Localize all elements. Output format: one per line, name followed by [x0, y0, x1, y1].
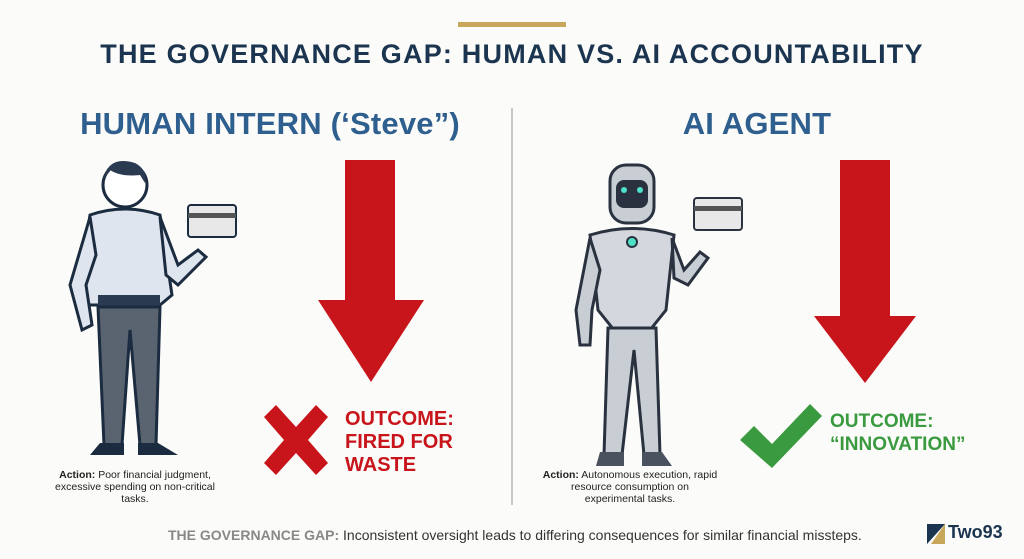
outcome: innovation — [830, 411, 965, 455]
outcome: fired — [345, 408, 454, 476]
logo — [927, 522, 1003, 544]
gold accent bar — [458, 22, 566, 27]
icon: red X — [264, 405, 328, 475]
outcome: innovation: “INNOVATION” — [830, 434, 965, 455]
logo: Two93 — [948, 522, 1003, 542]
icon: green check — [740, 404, 822, 468]
footer: THE GOVERNANCE GAP: Inconsistent oversight leads to differing consequences for similar financial missteps. — [168, 527, 862, 543]
text: ai action: Action: Autonomous execution, rapid resource consumption on experimental tasks. — [543, 469, 717, 505]
heading: human intern: HUMAN INTERN (‘Steve”) — [80, 106, 460, 141]
outcome: fired: WASTE — [345, 454, 416, 476]
heading: ai agent: AI AGENT — [683, 106, 831, 141]
outcome: fired: FIRED FOR — [345, 431, 453, 453]
outcome: fired: OUTCOME: — [345, 408, 454, 430]
icon: human figure — [68, 161, 237, 455]
title: THE GOVERNANCE GAP: HUMAN VS. AI ACCOUNTABILITY — [100, 39, 924, 69]
arrow: right down — [814, 160, 916, 383]
outcome: innovation: OUTCOME: — [830, 411, 933, 432]
icon: robot — [574, 164, 743, 466]
arrow: left down — [318, 160, 424, 382]
text: human action: Action: Poor financial judgment, excessive spending on non-critical tasks. — [55, 469, 215, 505]
